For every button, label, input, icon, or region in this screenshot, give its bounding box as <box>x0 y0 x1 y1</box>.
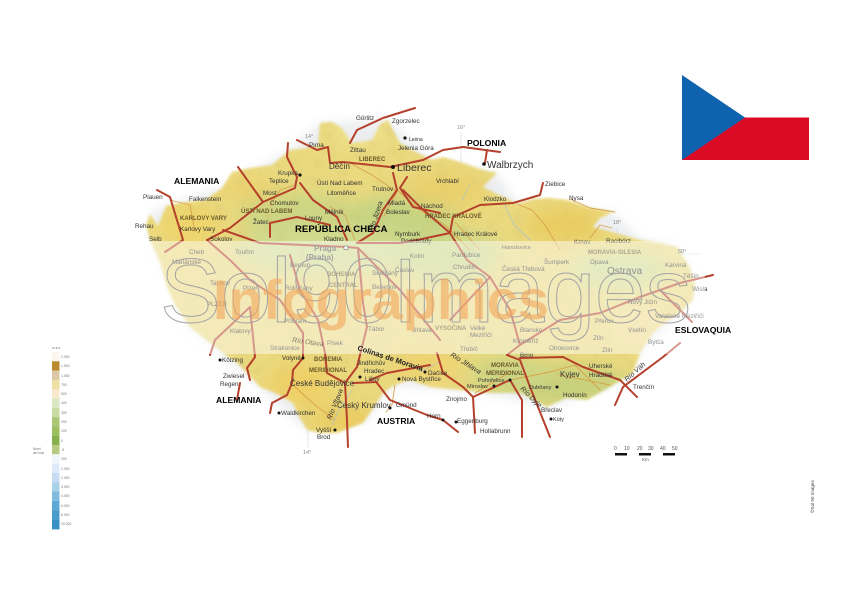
scale bar: 20 <box>637 446 643 452</box>
place labels: Görlitz <box>356 115 374 122</box>
terrain map <box>144 119 696 435</box>
place labels: Třebíč <box>460 346 478 353</box>
scale bar: 30 <box>648 446 654 452</box>
scale bar: 0 <box>614 446 617 452</box>
scale bar: Km <box>642 457 649 462</box>
elevation legend <box>33 346 71 529</box>
watermark veil over central band <box>150 241 705 354</box>
place labels: Chomutov <box>270 200 300 207</box>
place labels: Beroun <box>290 262 311 269</box>
elevation legend: 3.000 <box>61 485 70 489</box>
place labels: Kladno <box>324 236 344 243</box>
place labels: Teplice <box>269 178 289 185</box>
elevation legend: 10.000 <box>61 522 71 526</box>
labels: southern places: Hradec <box>364 368 384 375</box>
elevation legend: 500 <box>61 392 67 396</box>
place labels: Hanušovice <box>502 245 531 251</box>
graticule labels: 16° <box>457 125 465 131</box>
watermark: Infographics <box>213 268 549 331</box>
scale bar: 10 <box>624 446 630 452</box>
place labels: Jihlava <box>412 327 432 334</box>
place labels: Cheb <box>189 249 205 256</box>
place labels: Mladá <box>388 200 406 207</box>
place labels: Pardubice <box>452 252 481 259</box>
place labels: Plzeň <box>243 285 259 292</box>
place labels <box>135 115 708 359</box>
flag of the Czech Republic <box>682 75 809 160</box>
place labels: ÚSTÍ NAD LABEM <box>241 207 292 215</box>
graticule labels: 14° <box>305 134 313 140</box>
labels: southern places: Břeclav <box>541 407 563 414</box>
place labels: Liberec <box>397 162 431 174</box>
graticule labels: 18° <box>613 220 621 226</box>
place labels: Vrchlabí <box>436 178 459 185</box>
country names: ALEMANIA <box>216 395 261 405</box>
labels: southern places: Jindřichův <box>357 359 386 367</box>
city markers <box>218 136 558 432</box>
labels: southern places: MORAVIA <box>491 363 520 369</box>
place labels: Praga <box>314 244 337 253</box>
labels: southern places: Kyjev <box>560 370 580 379</box>
labels: rivers and hills: Colinas de Moravia <box>356 343 425 373</box>
elevation legend: 400 <box>61 401 67 405</box>
place labels: Čáslav <box>395 265 415 274</box>
place labels: Falkenstein <box>189 196 222 203</box>
place labels: Zlín <box>602 347 613 354</box>
main roads <box>157 108 713 447</box>
place labels: Tábor <box>368 326 384 333</box>
place labels: Těšín <box>683 273 699 280</box>
labels: southern places: Waldkirchen <box>281 410 316 417</box>
country names: AUSTRIA <box>377 416 415 426</box>
labels: southern places: Znojmo <box>446 396 467 403</box>
place labels: Tachov <box>210 280 231 287</box>
place labels: Strakonice <box>270 345 300 352</box>
place labels: Ziebice <box>545 181 566 188</box>
labels: southern places: Hollabrunn <box>480 428 511 435</box>
labels: rivers and hills: Río Váh <box>624 361 647 383</box>
place labels: Karviná <box>665 262 687 269</box>
place labels: Karlovy Vary <box>180 226 216 233</box>
labels: southern places: Volyně <box>282 355 301 362</box>
labels: southern places: Brod <box>317 434 331 441</box>
graticule labels: 14° <box>303 450 311 456</box>
place labels: CENTRAL <box>329 283 358 289</box>
labels: southern places: Pohořelice <box>478 378 504 384</box>
place labels: Kroměříž <box>513 338 539 345</box>
labels: southern places: Horn <box>427 413 441 420</box>
elevation legend: 1.000 <box>61 374 70 378</box>
place labels: Valašské Meziříčí <box>655 313 704 320</box>
place labels: Blansko <box>520 327 543 334</box>
place labels: Touřim <box>235 249 254 256</box>
country names <box>174 138 731 426</box>
place labels: Kolín <box>410 253 425 260</box>
elevation legend: 0 <box>61 439 63 443</box>
place labels: Šumperk <box>544 257 570 266</box>
elevation legend: -5 <box>61 448 64 452</box>
place labels: Česká Třebová <box>502 264 545 273</box>
place labels: Krnov <box>574 239 591 246</box>
place labels: Rokycany <box>285 285 313 292</box>
place labels: Zittau <box>350 147 366 154</box>
place labels: Ústí Nad Labem <box>317 178 362 187</box>
place labels: Klodzko <box>484 196 507 203</box>
place labels: KARLOVY VARY <box>180 216 227 222</box>
labels: southern places <box>220 355 655 441</box>
place labels: Racibórz <box>606 238 631 245</box>
elevation legend: 1.500 <box>61 364 70 368</box>
elevation legend: 100 <box>61 429 67 433</box>
place labels: Rehau <box>135 223 154 230</box>
elevation legend: 4.000 <box>61 494 70 498</box>
labels: southern places: Trenčín <box>633 384 655 391</box>
place labels: Trutnov <box>372 186 394 193</box>
place labels: Hradec Králové <box>454 231 498 238</box>
country names: REPÚBLICA CHECA <box>295 223 387 235</box>
place labels: Nový Jičín <box>628 299 658 306</box>
labels: southern places: Hradiště <box>589 372 613 379</box>
place labels: Žatec <box>253 217 269 226</box>
place labels: Děčín <box>329 162 350 171</box>
place labels: Mariánské <box>172 259 202 266</box>
place labels: HRADEC KRÁLOVÉ <box>425 212 482 220</box>
labels: rivers and hills: Río Jizera <box>368 200 385 233</box>
labels: southern places: BOHEMIA <box>314 357 343 363</box>
labels: southern places: Zwiesel <box>223 373 244 380</box>
labels: southern places: Lišov <box>365 376 381 383</box>
place labels: (Praha) <box>306 253 334 262</box>
labels: southern places: Kúty <box>553 417 564 423</box>
scale bar <box>614 446 678 462</box>
place labels: PLZEŇ <box>207 300 227 308</box>
place labels: Pirna <box>309 142 324 149</box>
place labels: Litoměřice <box>327 190 357 197</box>
labels: southern places: Gmünd <box>396 402 417 409</box>
place labels: Benešov <box>372 284 397 291</box>
elevation legend: 1.000 <box>61 467 70 471</box>
labels: rivers and hills: Río Dyje <box>519 385 543 409</box>
elevation legend: del mar <box>33 451 45 455</box>
labels: southern places: Hodonín <box>563 392 587 399</box>
labels: rivers and hills: Río Jihlava <box>449 352 482 376</box>
place labels: Most <box>263 190 277 197</box>
labels: southern places: Regen <box>220 381 239 388</box>
labels: southern places: MERIDIONAL <box>309 368 347 374</box>
place labels: Náchod <box>421 203 443 210</box>
country names: ALEMANIA <box>174 176 219 186</box>
place labels: Přerov <box>595 318 614 325</box>
labels: rivers and hills <box>292 200 647 421</box>
place labels: Sokolov <box>210 236 233 243</box>
labels: southern places: MERIDIONAL <box>486 371 524 377</box>
credit: ©Sol 90 Images <box>809 480 815 513</box>
labels: southern places: Uherské <box>589 363 613 370</box>
coastal relief shadow <box>150 120 695 430</box>
scale bar: 40 <box>660 446 666 452</box>
place labels: Leśna <box>409 137 423 143</box>
labels: southern places: Eggenburg <box>457 418 488 425</box>
elevation legend: 2.000 <box>61 476 70 480</box>
elevation legend: Nivel <box>33 447 41 451</box>
elevation legend: 750 <box>61 383 67 387</box>
labels: southern places: Vyšší <box>316 427 331 434</box>
place labels: Písek <box>327 340 344 347</box>
elevation legend: 8.000 <box>61 513 70 517</box>
labels: southern places: Kötzing <box>222 357 244 364</box>
labels: southern places: Miroslav <box>467 384 488 390</box>
labels: rivers and hills: Río Vltava <box>326 388 345 421</box>
place labels: Sedlčany <box>372 270 399 277</box>
place labels: Bytča <box>648 339 664 346</box>
place labels: Vsetín <box>628 327 646 334</box>
place labels: Walbrzych <box>487 160 533 171</box>
place labels: Klatovy <box>230 328 252 335</box>
place labels: Selb <box>149 236 162 243</box>
place labels: Příbram <box>284 318 306 325</box>
graticule labels: 50° <box>678 249 686 255</box>
place labels: BOHEMIA <box>327 272 356 278</box>
place labels: Jelenia Góra <box>398 145 434 152</box>
place labels: Zgorzelec <box>392 118 420 125</box>
scale bar: 50 <box>672 446 678 452</box>
watermark: Sol90Images <box>160 241 691 342</box>
place labels: Krupka <box>278 170 298 177</box>
elevation legend: 2.000 <box>61 355 70 359</box>
labels: southern places: Nová Bystřice <box>402 376 441 383</box>
elevation legend: 300 <box>61 411 67 415</box>
place labels: Wisla <box>692 286 708 293</box>
place labels: Brno <box>520 352 534 359</box>
place labels: Opava <box>590 259 609 266</box>
graticule labels <box>303 125 686 456</box>
place labels: Poděbrady <box>401 238 432 245</box>
country names: POLONIA <box>467 138 506 148</box>
place labels: Meziříčí <box>470 332 492 339</box>
place labels: VYSOČINA <box>435 325 467 332</box>
elevation legend: 6.000 <box>61 504 70 508</box>
labels: southern places: České Budějovice <box>290 379 355 388</box>
labels: southern places: Dačice <box>428 370 448 377</box>
place labels: Zlín <box>593 335 604 342</box>
elevation legend: 200 <box>61 420 67 424</box>
place labels: Mělník <box>325 209 344 216</box>
place labels: Nymburk <box>395 231 421 238</box>
elevation legend: m.s.n. <box>52 346 61 350</box>
place labels: Chrudim <box>453 264 477 271</box>
graticule lines <box>308 132 700 448</box>
place labels: Otrokovice <box>549 345 580 352</box>
elevation legend: 200 <box>61 457 67 461</box>
place labels: Ostrava <box>607 266 642 277</box>
place labels: Louny <box>305 215 323 222</box>
place labels: Nysa <box>569 195 584 202</box>
labels: southern places: Český Krumlov <box>337 401 391 410</box>
rivers and secondary roads <box>170 163 615 425</box>
place labels: LIBEREC <box>359 157 386 163</box>
place labels: Boleslav <box>386 209 411 216</box>
place labels: Plauen <box>143 194 163 201</box>
labels: southern places: Dubňany <box>529 385 552 391</box>
place labels: Velké <box>470 325 486 332</box>
country names: ESLOVAQUIA <box>675 325 731 335</box>
labels: rivers and hills: Río Otava <box>292 337 324 348</box>
place labels: MORAVIA-SILESIA <box>588 250 642 256</box>
